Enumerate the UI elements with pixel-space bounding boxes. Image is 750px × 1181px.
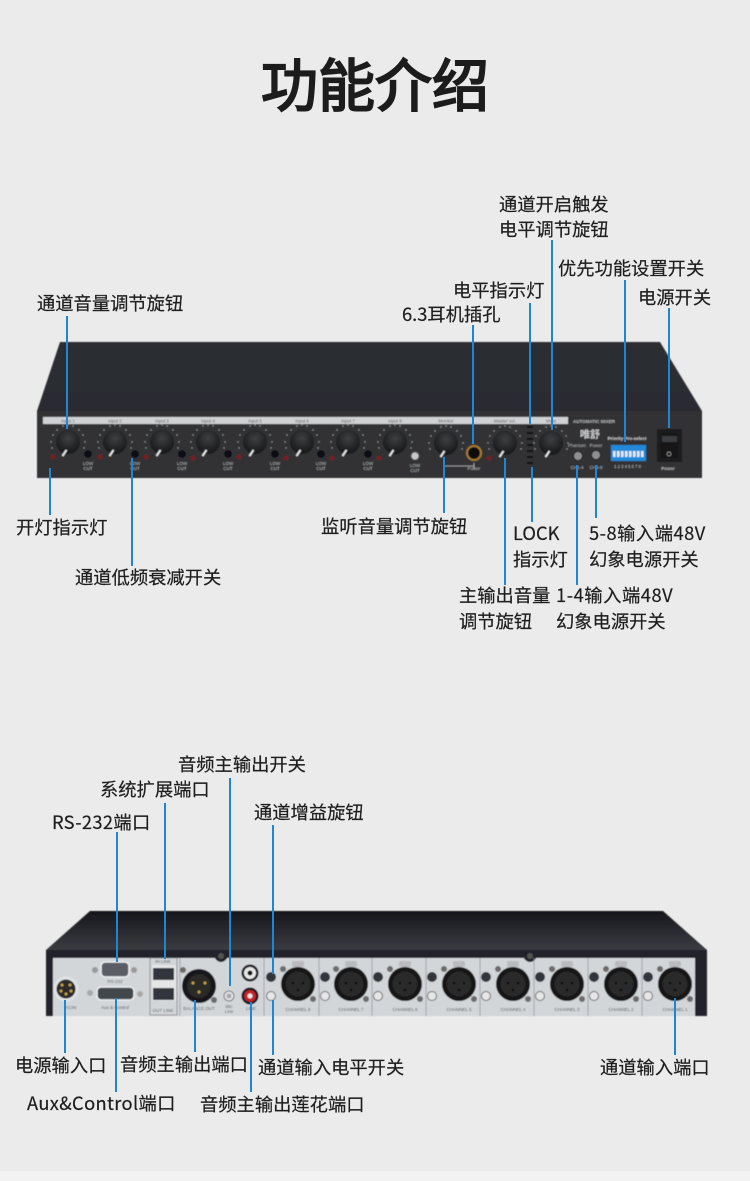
channel knobs [50,424,569,457]
channel name strip: Input 7 [341,418,355,424]
panel: front view device [37,342,702,478]
monitor bracket [444,463,474,469]
low cut captions: CUT [410,468,420,473]
low cut captions: LOW [130,461,141,466]
label: channel trigger level knob line 2: 电平调节旋钮 [499,216,609,242]
label: master volume line 2: 调节旋钮 [459,608,532,634]
channel captions [285,1007,688,1012]
silver connector plate [53,958,695,1016]
power rocker switch [657,429,682,471]
channel name strip: Master vol. [494,418,516,424]
aux control port: Aux & Control [101,1005,129,1010]
ethernet link ports: OUT LINK [153,1008,173,1013]
label: channel gain knob: 通道增益旋钮 [254,799,364,825]
label: headphone jack: 6.3耳机插孔 [402,301,500,327]
channel captions: CHANNEL 7 [338,1007,364,1012]
label: channel trigger level knob: 通道开启触发 [499,191,609,217]
phantom power switches: CH5-8 [589,465,603,470]
channel captions: CHANNEL 3 [554,1007,580,1012]
label: level indicator: 电平指示灯 [453,277,544,303]
label: expansion port: 系统扩展端口 [100,776,210,802]
device top surface [37,342,702,411]
low cut captions: LOW [177,461,188,466]
main output switch: Line [225,1009,234,1014]
panel: rear view device [46,911,707,1016]
power rocker switch: Power [661,466,675,471]
rs-232 port: RS-232 [107,979,123,984]
channel captions: CHANNEL 6 [392,1007,418,1012]
main output switch: Mic [226,1004,233,1009]
low cut captions: LOW [270,461,281,466]
power input connector: ACIN [66,1005,76,1010]
priority dip switch: Priority Pro-select [608,436,647,441]
low cut captions: LOW [410,463,421,468]
channel captions: CHANNEL 8 [285,1007,311,1012]
channel name strip: Input 2 [108,418,122,424]
low cut captions: CUT [270,466,280,471]
channel name strip: Monitor [438,418,454,424]
label: monitor volume knob: 监听音量调节旋钮 [321,513,467,539]
label: open indicator: 开灯指示灯 [16,514,107,540]
phantom power switches [568,443,603,470]
labels: rear view [15,751,710,1117]
brand block [573,419,616,441]
balance out xlr: BALANCE OUT [183,1006,215,1011]
label: low cut switch: 通道低频衰减开关 [75,564,221,590]
headphone jack: Power [468,466,481,471]
phantom power switches: CH1-4 [570,465,584,470]
low cut captions: LOW [83,461,94,466]
main output switch [224,991,234,1014]
channel indicator leds [51,455,491,460]
label: rs-232 port: RS-232端口 [52,809,151,835]
headphone jack [467,446,481,471]
label: 5-8 phantom line 2: 幻象电源开关 [589,546,699,572]
channel name strip [43,417,568,424]
label: aux control port: Aux&Control端口 [27,1090,176,1116]
channel captions: CHANNEL 5 [446,1007,472,1012]
power input connector [54,976,78,1010]
label: main output port: 音频主输出端口 [120,1051,248,1077]
label: master volume: 主输出音量 [459,582,550,608]
channel captions: CHANNEL 2 [608,1007,634,1012]
phantom power switches: Power [590,443,603,448]
channel name strip: Input 3 [155,418,169,424]
low cut captions: LOW [223,461,234,466]
device top surface [46,911,707,950]
low cut captions: CUT [223,466,233,471]
rs-232 port [92,962,137,984]
label: power switch: 电源开关 [638,284,711,310]
phantom power switches: Phantom [568,443,586,448]
channel name strip: Input 6 [295,418,309,424]
channel captions: CHANNEL 4 [500,1007,526,1012]
low cut captions: CUT [177,466,187,471]
brand block: AUTOMATIC MIXER [573,419,616,424]
arrows: front view leader lines [50,240,669,585]
channel captions: CHANNEL 1 [662,1007,688,1012]
low cut white button [411,452,419,460]
plate dividers [180,958,642,1016]
brand block: 唯舒 [580,428,600,441]
low cut captions: CUT [316,466,326,471]
rear mounting screw [214,950,228,962]
ethernet link ports [150,958,177,1015]
low cut captions: CUT [130,466,140,471]
channel gain knobs [266,972,653,982]
level meter leds [527,426,533,464]
priority dip switch [608,436,647,469]
low cut captions: LOW [363,461,374,466]
channel name strip: Mute [546,418,556,424]
ethernet link ports: IN LINK [155,959,171,964]
screw right [523,950,537,962]
label: 5-8 phantom: 5-8输入端48V [589,520,706,546]
channel level switches [266,992,652,1000]
low cut captions: CUT [363,466,373,471]
channel name strip: Input 8 [388,418,402,424]
aux control port [87,987,143,1010]
labels: front view [16,191,711,634]
label: input level switch: 通道输入电平开关 [258,1054,404,1080]
channel name strip: Input 4 [201,418,215,424]
rca jacks [242,964,258,1011]
low cut captions [83,461,421,473]
balance out xlr [180,967,217,1011]
arrows: rear view leader lines [65,778,675,1092]
channel name strip: Input 5 [248,418,262,424]
low cut buttons [84,450,372,458]
low cut captions: LOW [316,461,327,466]
label: lock: LOCK [513,520,560,546]
channel input groups [280,961,693,1002]
label: 1-4 phantom line 2: 幻象电源开关 [556,608,666,634]
label: main output switch: 音频主输出开关 [178,751,306,777]
rear dark frame [46,950,707,1016]
label: lock line 2: 指示灯 [513,546,568,572]
front panel [37,411,702,478]
label: channel input port: 通道输入端口 [600,1054,710,1080]
label: rca port: 音频主输出莲花端口 [200,1091,365,1117]
label: power input: 电源输入口 [15,1052,106,1078]
rca jacks: LINE [246,1006,256,1011]
label: channel volume knob: 通道音量调节旋钮 [37,290,183,316]
priority dip switch: 12345678 [614,464,642,469]
title: 功能介绍 [261,55,489,119]
label: 1-4 phantom: 1-4输入端48V [556,582,673,608]
channel name strip: Input 1 [61,418,75,424]
label: priority switch: 优先功能设置开关 [558,255,704,281]
low cut captions: CUT [83,466,93,471]
